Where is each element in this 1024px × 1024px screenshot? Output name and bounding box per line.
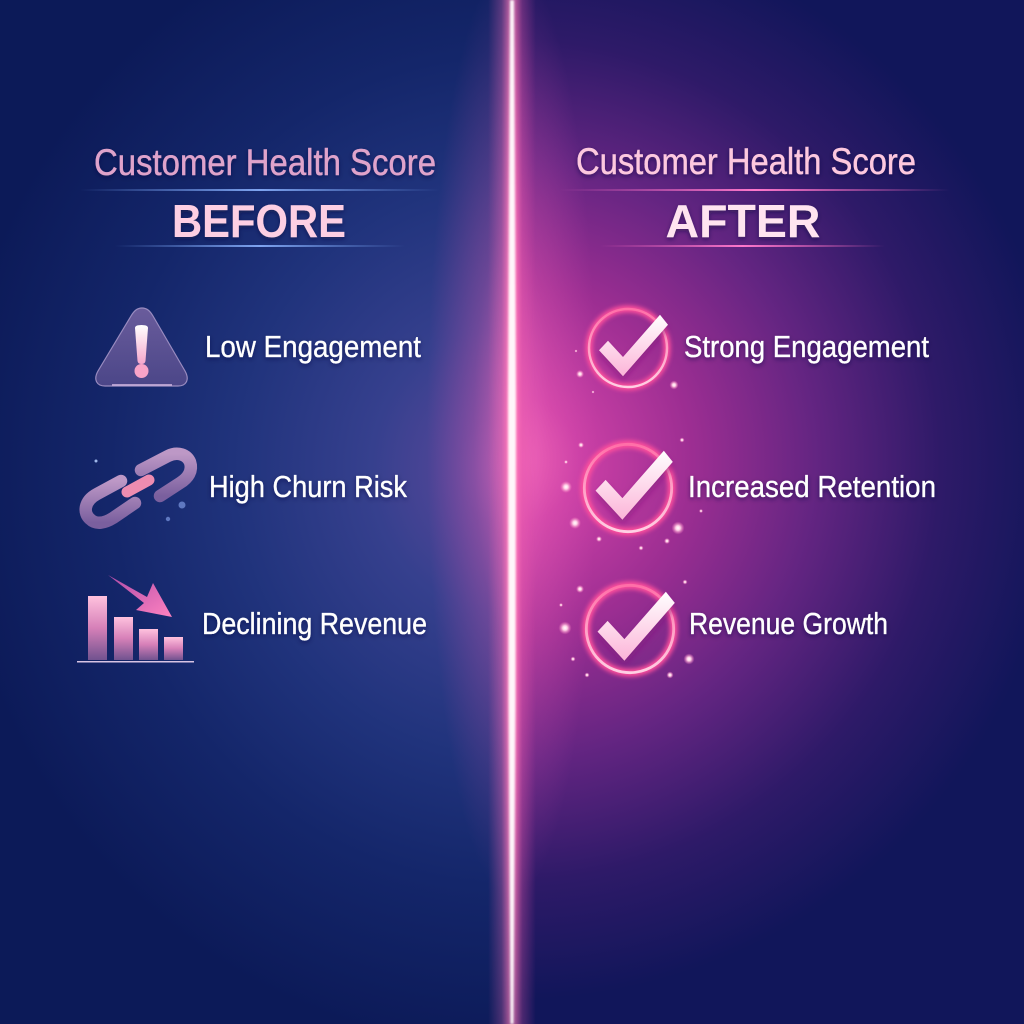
after heading: Customer Health Score: Customer Health Score <box>576 141 916 182</box>
background: after panel <box>512 0 1024 1024</box>
icon: declining bar chart <box>77 575 194 662</box>
before heading: Customer Health Score: Customer Health Score <box>94 142 436 183</box>
after title: AFTER <box>666 195 820 247</box>
icon: broken chain <box>86 454 191 523</box>
glowing divider <box>488 0 536 1024</box>
background: before panel <box>0 0 512 1024</box>
label: High Churn Risk: High Churn Risk <box>209 469 407 504</box>
label: Revenue Growth: Revenue Growth <box>689 606 888 641</box>
background: centre glow <box>427 0 597 900</box>
label: Strong Engagement: Strong Engagement <box>684 329 929 364</box>
panel: after <box>558 141 950 678</box>
panel: before <box>77 142 440 662</box>
icon: check 1 <box>574 309 678 394</box>
label: Low Engagement: Low Engagement <box>205 329 421 364</box>
label: Increased Retention: Increased Retention <box>688 469 936 504</box>
label: Declining Revenue: Declining Revenue <box>202 606 427 641</box>
icon: check 2 <box>560 438 703 550</box>
icon: warning triangle <box>96 308 187 386</box>
before title: BEFORE <box>172 195 346 247</box>
icon: check 3 <box>558 580 694 678</box>
